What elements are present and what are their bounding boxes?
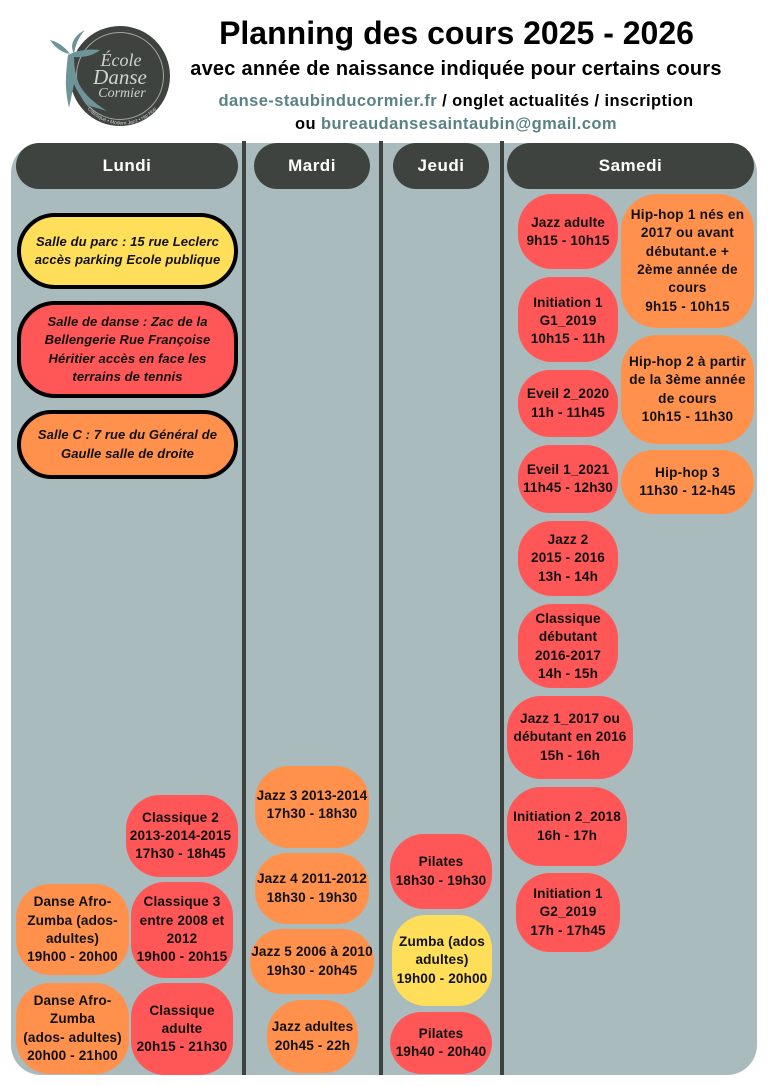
legend: Salle C: Salle C : 7 rue du Général de [38,427,217,442]
heading: Lundi: Lundi [103,156,151,175]
logo: Ecole de Danse du Cormier: Danse [92,65,147,89]
course: Classique 3: 19h00 - 20h15 [137,949,227,964]
course: Pilates 19h40: 19h40 - 20h40 [396,1044,486,1059]
course: Hip-hop 3 [621,450,754,514]
course: Jazz 2: 2015 - 2016 [531,550,605,565]
course: Jazz 5: 19h30 - 20h45 [267,962,357,978]
logo: Ecole de Danse du Cormier: Cormier [98,86,146,101]
contact links: ou bureaudansesaintaubin@gmail.com [295,115,617,133]
course: Classique debutant: débutant [539,629,597,644]
course: Zumba: 19h00 - 20h00 [397,971,487,986]
course: Hip-hop 1: Hip-hop 1 nés en [631,207,744,222]
panel: Mardi [250,143,374,1073]
course: Eveil 1 [518,445,618,513]
course: Jazz adulte [518,194,618,269]
course: Eveil 1: Eveil 1_2021 [527,462,609,477]
course: Jazz adulte: Jazz adulte [531,215,605,230]
course: Jazz 5 [250,929,374,994]
course: Danse Afro-Zumba 20h: (ados- adultes) [23,1030,122,1044]
course: Initiation 2: 16h - 17h [537,828,597,842]
course: Hip-hop 2: Hip-hop 2 à partir [629,354,746,369]
course: Hip-hop 1: 9h15 - 10h15 [645,299,730,314]
heading: Lundi [16,143,238,189]
course: Classique debutant [518,604,618,688]
divider: Jeudi / Samedi [500,141,504,1075]
course: Initiation 2: Initiation 2_2018 [513,809,621,824]
course: Pilates 19h40 [390,1012,492,1074]
course: Jazz 3 [255,766,369,848]
course: Jazz 2: 13h - 14h [538,569,598,584]
course: Danse Afro-Zumba 19h: Zumba (ados- [27,913,118,928]
course: Danse Afro-Zumba 19h: 19h00 - 20h00 [27,949,118,964]
legend: Salle de danse: Bellengerie Rue Françoise [45,332,210,347]
course: Hip-hop 3: 11h30 - 12-h45 [639,483,736,498]
course: Classique debutant: Classique [535,611,601,626]
course: Jazz adultes [267,1000,358,1073]
course: Danse Afro-Zumba 20h: 20h00 - 21h00 [27,1048,118,1063]
course: Hip-hop 3: Hip-hop 3 [655,465,720,480]
course: Jazz 2: Jazz 2 [548,532,588,547]
heading: Jeudi: Jeudi [418,156,464,175]
contact links: danse-staubinducormier.fr / onglet actualités / inscription [219,92,693,110]
course: Classique adulte: Classique [149,1003,215,1018]
heading: Samedi [507,143,754,189]
course: Jazz 4 [255,853,369,924]
heading: Samedi: Samedi [599,156,662,175]
course: Danse Afro-Zumba 19h [16,884,129,975]
course: Hip-hop 1 [621,194,754,328]
course: Zumba [392,915,492,1006]
course: Zumba: adultes) [415,952,469,967]
course: Initiation 1 G1 [518,277,618,362]
course: Eveil 2: 11h - 11h45 [531,404,605,420]
panel: Jeudi [390,143,492,1074]
legend: Salle C: Gaulle salle de droite [61,446,194,460]
course: Jazz 5: Jazz 5 2006 à 2010 [251,944,373,959]
course: Classique 2: 2013-2014-2015 [130,828,231,843]
course: Pilates 18h30: Pilates [419,854,463,869]
course: Initiation 1 G2 [516,873,620,952]
course: Initiation 1 G2: Initiation 1 [533,886,603,901]
legend: Salle du parc: accès parking Ecole publique [35,252,220,267]
panel: Lundi [16,143,238,1075]
course: Hip-hop 1: 2017 ou avant [641,225,734,240]
course: Hip-hop 1: débutant.e + [646,244,729,259]
course: Initiation 1 G1: G1_2019 [540,313,596,328]
heading: Mardi: Mardi [288,156,336,175]
contact links [219,92,693,133]
course: Jazz 1: 15h - 16h [540,748,600,763]
heading: Mardi [254,143,370,189]
legend: Salle de danse: Salle de danse : Zac de la [47,314,208,329]
course: Jazz 4: Jazz 4 2011-2012 [257,871,367,886]
course: Classique debutant: 14h - 15h [538,666,598,681]
legend: Salle de danse: Héritier accès en face les [48,350,206,366]
course: Zumba: Zumba (ados [399,934,485,949]
course: Eveil 1: 11h45 - 12h30 [523,480,613,495]
course: Danse Afro-Zumba 20h [16,983,129,1074]
course: Eveil 2: Eveil 2_2020 [527,386,609,401]
course: Jazz adulte: 9h15 - 10h15 [526,233,610,248]
course: Classique 3: entre 2008 et [140,913,224,928]
course: Classique 2 [126,795,238,877]
course: Classique 3: 2012 [167,931,197,946]
legend: Salle de danse [17,301,238,398]
course: Danse Afro-Zumba 19h: Danse Afro- [34,894,111,909]
legend: Salle C [17,410,238,479]
legend: Salle du parc [17,213,238,289]
legend: Salle du parc: Salle du parc : 15 rue Leclerc [36,234,219,249]
course: Hip-hop 2: de la 3ème année [629,372,746,387]
course: Danse Afro-Zumba 19h: adultes) [46,931,99,946]
logo: Ecole de Danse du Cormier: Classique • Modern Jazz • Hip Hop [88,107,156,125]
panel: Samedi [507,143,754,952]
course: Jazz 2 [518,521,618,596]
course: Initiation 1 G1: 10h15 - 11h [531,331,605,346]
course: Initiation 1 G1: Initiation 1 [533,295,603,310]
subtitle: avec année de naissance indiquée pour certains cours [190,58,722,80]
heading: Jeudi [393,143,489,189]
course: Pilates 19h40: Pilates [419,1026,463,1041]
divider: Mardi / Jeudi [379,141,383,1075]
course: Classique 2: 17h30 - 18h45 [135,846,226,861]
course: Classique debutant: 2016-2017 [535,648,601,662]
course: Classique 3 [131,882,233,978]
course: Classique 2: Classique 2 [142,810,219,825]
course: Jazz adultes: 20h45 - 22h [275,1038,350,1052]
logo: Ecole de Danse du Cormier: École [100,49,141,70]
course: Danse Afro-Zumba 20h: Danse Afro- [34,993,111,1008]
course: Classique adulte: adulte [162,1021,202,1036]
course: Classique adulte: 20h15 - 21h30 [137,1039,227,1054]
legend: Salle de danse: terrains de tennis [72,369,183,384]
course: Hip-hop 2: de cours [658,390,717,406]
course: Jazz 1 [507,696,633,779]
course: Jazz adultes: Jazz adultes [272,1019,353,1034]
title: Planning des cours 2025 - 2026 [219,15,694,51]
course: Hip-hop 1: cours [668,280,707,295]
course: Pilates 18h30: 18h30 - 19h30 [396,872,486,888]
divider: Lundi / Mardi [242,141,246,1075]
course: Initiation 1 G2: G2_2019 [540,904,596,919]
logo: Ecole de Danse du Cormier [50,26,170,126]
course: Jazz 3: Jazz 3 2013-2014 [257,788,367,803]
course: Hip-hop 2: 10h15 - 11h30 [642,409,733,424]
course: Hip-hop 2 [621,335,754,444]
course: Initiation 2 [507,787,627,866]
course: Eveil 2 [518,370,618,437]
course: Jazz 1: Jazz 1_2017 ou [520,711,620,726]
course: Pilates 18h30 [390,834,492,909]
course: Classique 3: Classique 3 [144,894,220,909]
course: Hip-hop 1: 2ème année de [637,262,738,277]
course: Jazz 3: 17h30 - 18h30 [267,806,357,821]
course: Initiation 1 G2: 17h - 17h45 [530,923,606,938]
course: Classique adulte [131,983,233,1075]
course: Danse Afro-Zumba 20h: Zumba [50,1011,95,1026]
course: Jazz 4: 18h30 - 19h30 [267,890,357,904]
course: Jazz 1: débutant en 2016 [514,729,626,744]
